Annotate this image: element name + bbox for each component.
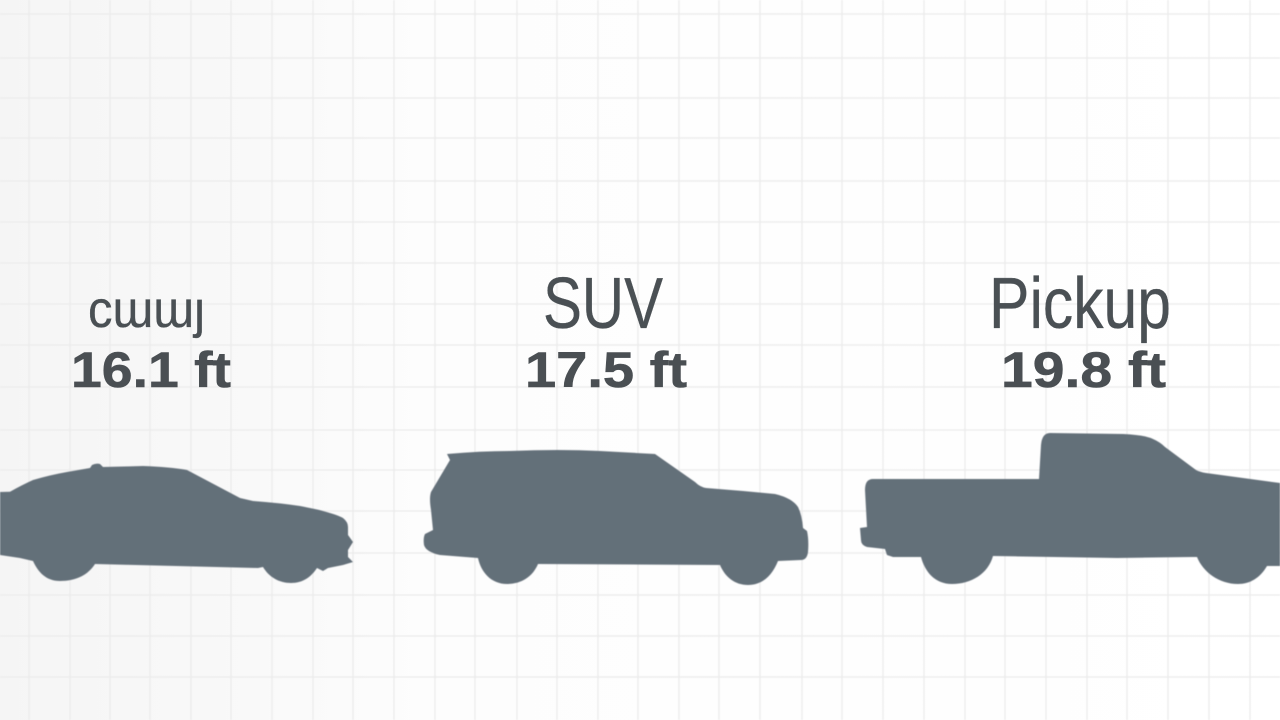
label: car name: cɯɯȷ [88,281,205,339]
icon: SUV silhouette [424,450,808,585]
column: car [0,281,353,583]
label: SUV name: SUV [543,264,663,344]
value: SUV length: 17.5 ft [525,342,687,398]
value: car length: 16.1 ft [71,342,231,398]
column: pickup [860,264,1280,584]
value: pickup length: 19.8 ft [1001,342,1166,398]
label: pickup name: Pickup [989,264,1171,344]
column: SUV [424,264,808,585]
icon: car silhouette [0,464,353,583]
icon: pickup silhouette [860,433,1280,584]
